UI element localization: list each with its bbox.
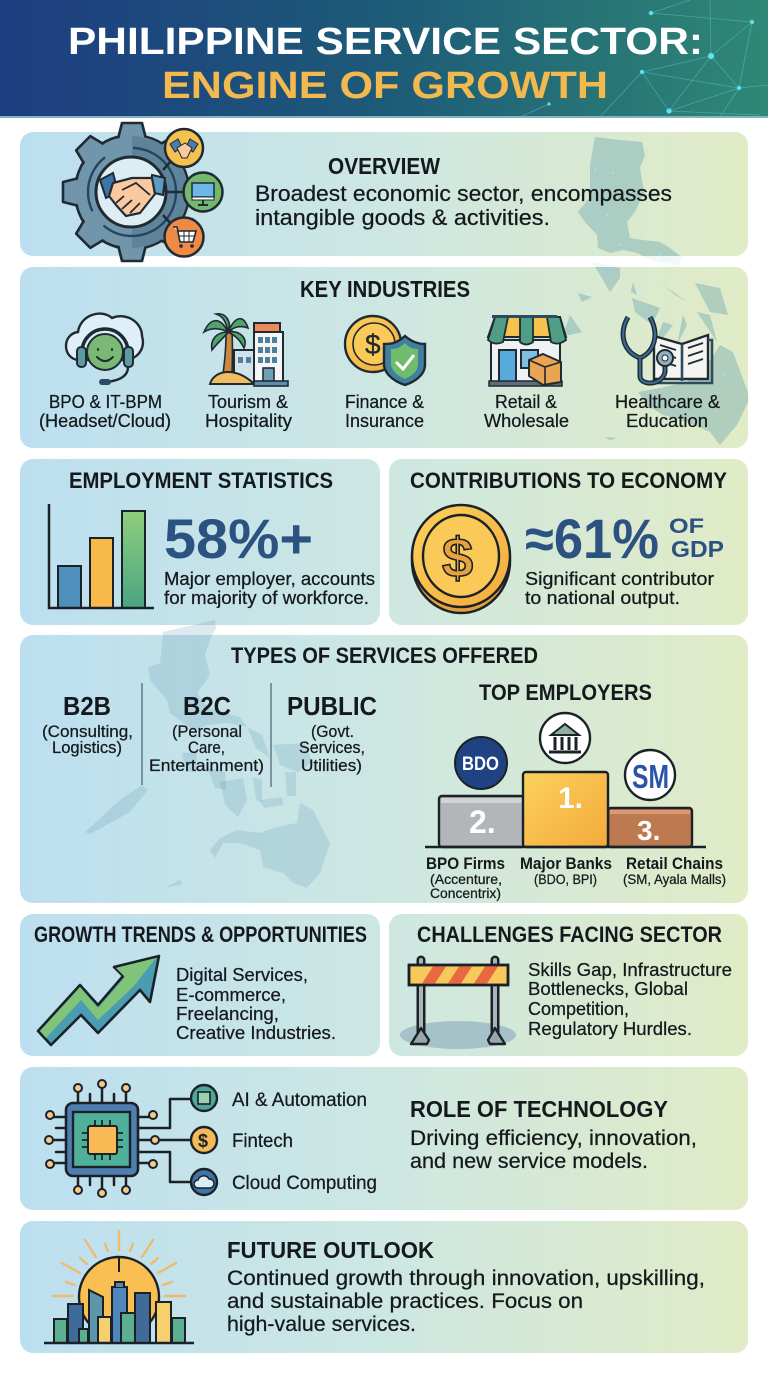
growth text: [176, 964, 336, 1043]
service type: B2C: B2C: [183, 691, 231, 721]
background map: centre: [85, 620, 330, 888]
tech item: cloud: [191, 1169, 377, 1195]
title: ENGINE OF GROWTH: [162, 65, 608, 107]
icon: gold coin: $: [442, 526, 473, 589]
icon: sunrise city: [44, 1231, 194, 1343]
contributions text: Significant contributor: [525, 568, 714, 589]
employment text: for majority of workforce.: [164, 587, 369, 608]
tech item: AI: AI & Automation: [232, 1090, 367, 1111]
panel: types of services and top employers: [20, 635, 748, 903]
healthcare label: Healthcare &: [615, 392, 720, 412]
podium chart: 3.: [637, 815, 660, 846]
healthcare label: Education: [626, 411, 708, 431]
stat: 61% of GDP: GDP: [671, 536, 724, 562]
background map: upper right: [563, 137, 750, 445]
industry: BPO: [39, 314, 171, 431]
future text: high-value services.: [227, 1313, 416, 1336]
logo: BDO: BDO: [462, 754, 499, 775]
industry: healthcare: [615, 317, 720, 431]
key industries heading: KEY INDUSTRIES: [300, 276, 470, 302]
employer: BPO firms: [426, 854, 505, 901]
logo: BDO: [455, 737, 507, 789]
BPO label: (Headset/Cloud): [39, 411, 171, 431]
BPO label: [39, 392, 171, 431]
growth text: E-commerce,: [176, 984, 286, 1005]
employer: major banks: (BDO, BPI): [534, 871, 597, 887]
overview text: intangible goods & activities.: [255, 205, 550, 230]
challenges text: Competition,: [528, 998, 629, 1019]
employer: retail chains: (SM, Ayala Malls): [623, 871, 726, 887]
service type: B2C: [149, 691, 264, 775]
service type: public: PUBLIC: [287, 691, 377, 721]
panel: employment statistics: [20, 459, 380, 625]
tech item: fintech: [191, 1127, 293, 1153]
top employers heading: TOP EMPLOYERS: [479, 680, 652, 705]
employer: BPO firms: BPO Firms: [426, 854, 505, 873]
industry: retail: [484, 315, 569, 431]
healthcare label: [615, 392, 720, 431]
overview text: [255, 181, 672, 230]
finance label: [345, 392, 424, 431]
panel: key industries: [20, 267, 748, 448]
technology text: and new service models.: [410, 1150, 648, 1173]
icon: shopping cart badge: [164, 218, 204, 256]
employer: major banks: Major Banks: [520, 854, 612, 873]
icon: palm tree and hotel: [204, 314, 288, 386]
industry: finance: [345, 316, 425, 431]
service type: B2B: Logistics): [52, 738, 122, 757]
employer: BPO firms: (Accenture,: [430, 871, 502, 887]
tourism label: [205, 392, 292, 431]
technology heading: ROLE OF TECHNOLOGY: [410, 1096, 668, 1122]
icon: gear with handshake: [63, 123, 222, 261]
service type: B2B: (Consulting,: [42, 722, 133, 741]
icon: storefront with box: [488, 315, 566, 386]
retail label: Retail &: [495, 392, 557, 412]
future text: and sustainable practices. Focus on: [227, 1290, 583, 1313]
employer: retail chains: [623, 854, 726, 887]
contributions heading: CONTRIBUTIONS TO ECONOMY: [410, 468, 727, 493]
industry: tourism: [204, 314, 292, 431]
challenges text: Bottlenecks, Global: [528, 978, 688, 999]
icon: coin and shield: $: [365, 329, 381, 360]
podium chart: 2.: [469, 804, 496, 840]
icon: handshake badge: [165, 129, 203, 167]
future heading: FUTURE OUTLOOK: [227, 1237, 434, 1263]
icon: bank: [540, 713, 590, 763]
employer: retail chains: Retail Chains: [626, 854, 723, 873]
service type: public: Utilities): [301, 756, 362, 775]
icon: circuit chip: [45, 1080, 191, 1197]
tourism label: Tourism &: [208, 392, 288, 412]
service type: B2C: (Personal: [172, 722, 242, 741]
challenges text: Skills Gap, Infrastructure: [528, 959, 732, 980]
employment heading: EMPLOYMENT STATISTICS: [69, 468, 333, 493]
growth text: Digital Services,: [176, 964, 308, 985]
growth text: Creative Industries.: [176, 1022, 336, 1043]
tech item: AI: [191, 1085, 367, 1111]
overview text: Broadest economic sector, encompasses: [255, 181, 672, 206]
types of services heading: TYPES OF SERVICES OFFERED: [231, 643, 538, 668]
employment text: [164, 568, 375, 608]
growth heading: GROWTH TRENDS & OPPORTUNITIES: [34, 922, 367, 947]
finance label: Insurance: [345, 411, 424, 431]
challenges heading: CHALLENGES FACING SECTOR: [417, 922, 722, 947]
challenges text: [528, 959, 732, 1039]
tech item: fintech: Fintech: [232, 1131, 293, 1152]
panel: contributions to economy: [389, 459, 748, 625]
network decoration: [520, 0, 768, 117]
stat: 58%+: 58%+: [164, 507, 313, 570]
retail label: Wholesale: [484, 411, 569, 431]
panel: role of technology: [20, 1067, 748, 1210]
icon: monitor badge: [184, 172, 222, 212]
title: [68, 21, 703, 107]
icon: stethoscope and book: [623, 317, 712, 383]
service type: B2B: [42, 691, 133, 757]
icon: headset and cloud: [66, 314, 143, 385]
service type: B2B: B2B: [63, 691, 111, 721]
header banner: [0, 0, 768, 118]
overview heading: OVERVIEW: [328, 153, 440, 179]
service type: public: (Govt.: [311, 722, 354, 741]
service type: public: [287, 691, 377, 775]
icon: gold coin: [412, 505, 510, 613]
finance label: Finance &: [345, 392, 424, 412]
technology text: [410, 1127, 697, 1173]
contributions text: to national output.: [525, 587, 680, 608]
top employers: [425, 680, 726, 901]
tourism label: Hospitality: [205, 411, 292, 431]
panel: growth trends: [20, 914, 380, 1056]
bar chart: [49, 504, 154, 608]
tech item: fintech: $: [198, 1131, 208, 1151]
technology text: Driving efficiency, innovation,: [410, 1127, 697, 1150]
panel: future outlook: [20, 1221, 748, 1353]
service type: B2C: Entertainment): [149, 756, 264, 775]
future text: Continued growth through innovation, upskilling,: [227, 1267, 705, 1290]
BPO label: BPO & IT-BPM: [49, 392, 162, 412]
tech item: cloud: Cloud Computing: [232, 1173, 377, 1194]
stat: 61% of GDP: OF: [669, 515, 704, 538]
logo: SM: SM: [632, 758, 669, 795]
challenges text: Regulatory Hurdles.: [528, 1018, 692, 1039]
contributions text: [525, 568, 714, 608]
panel: overview: [20, 123, 748, 261]
employment text: Major employer, accounts: [164, 568, 375, 589]
panel: challenges: [389, 914, 748, 1056]
future text: [227, 1267, 705, 1336]
employer: BPO firms: Concentrix): [430, 885, 501, 901]
title: PHILIPPINE SERVICE SECTOR:: [68, 21, 703, 63]
podium chart: [425, 772, 706, 847]
service type: public: Services,: [299, 738, 365, 757]
icon: road barrier: [400, 960, 516, 1049]
service type: B2C: Care,: [188, 738, 225, 757]
employer: major banks: [520, 854, 612, 887]
logo: SM: [625, 750, 675, 800]
retail label: [484, 392, 569, 431]
podium chart: 1.: [558, 782, 583, 815]
icon: growth arrow: [38, 956, 159, 1045]
growth text: Freelancing,: [176, 1003, 279, 1024]
stat: 61% of GDP: ≈61%: [525, 507, 659, 570]
